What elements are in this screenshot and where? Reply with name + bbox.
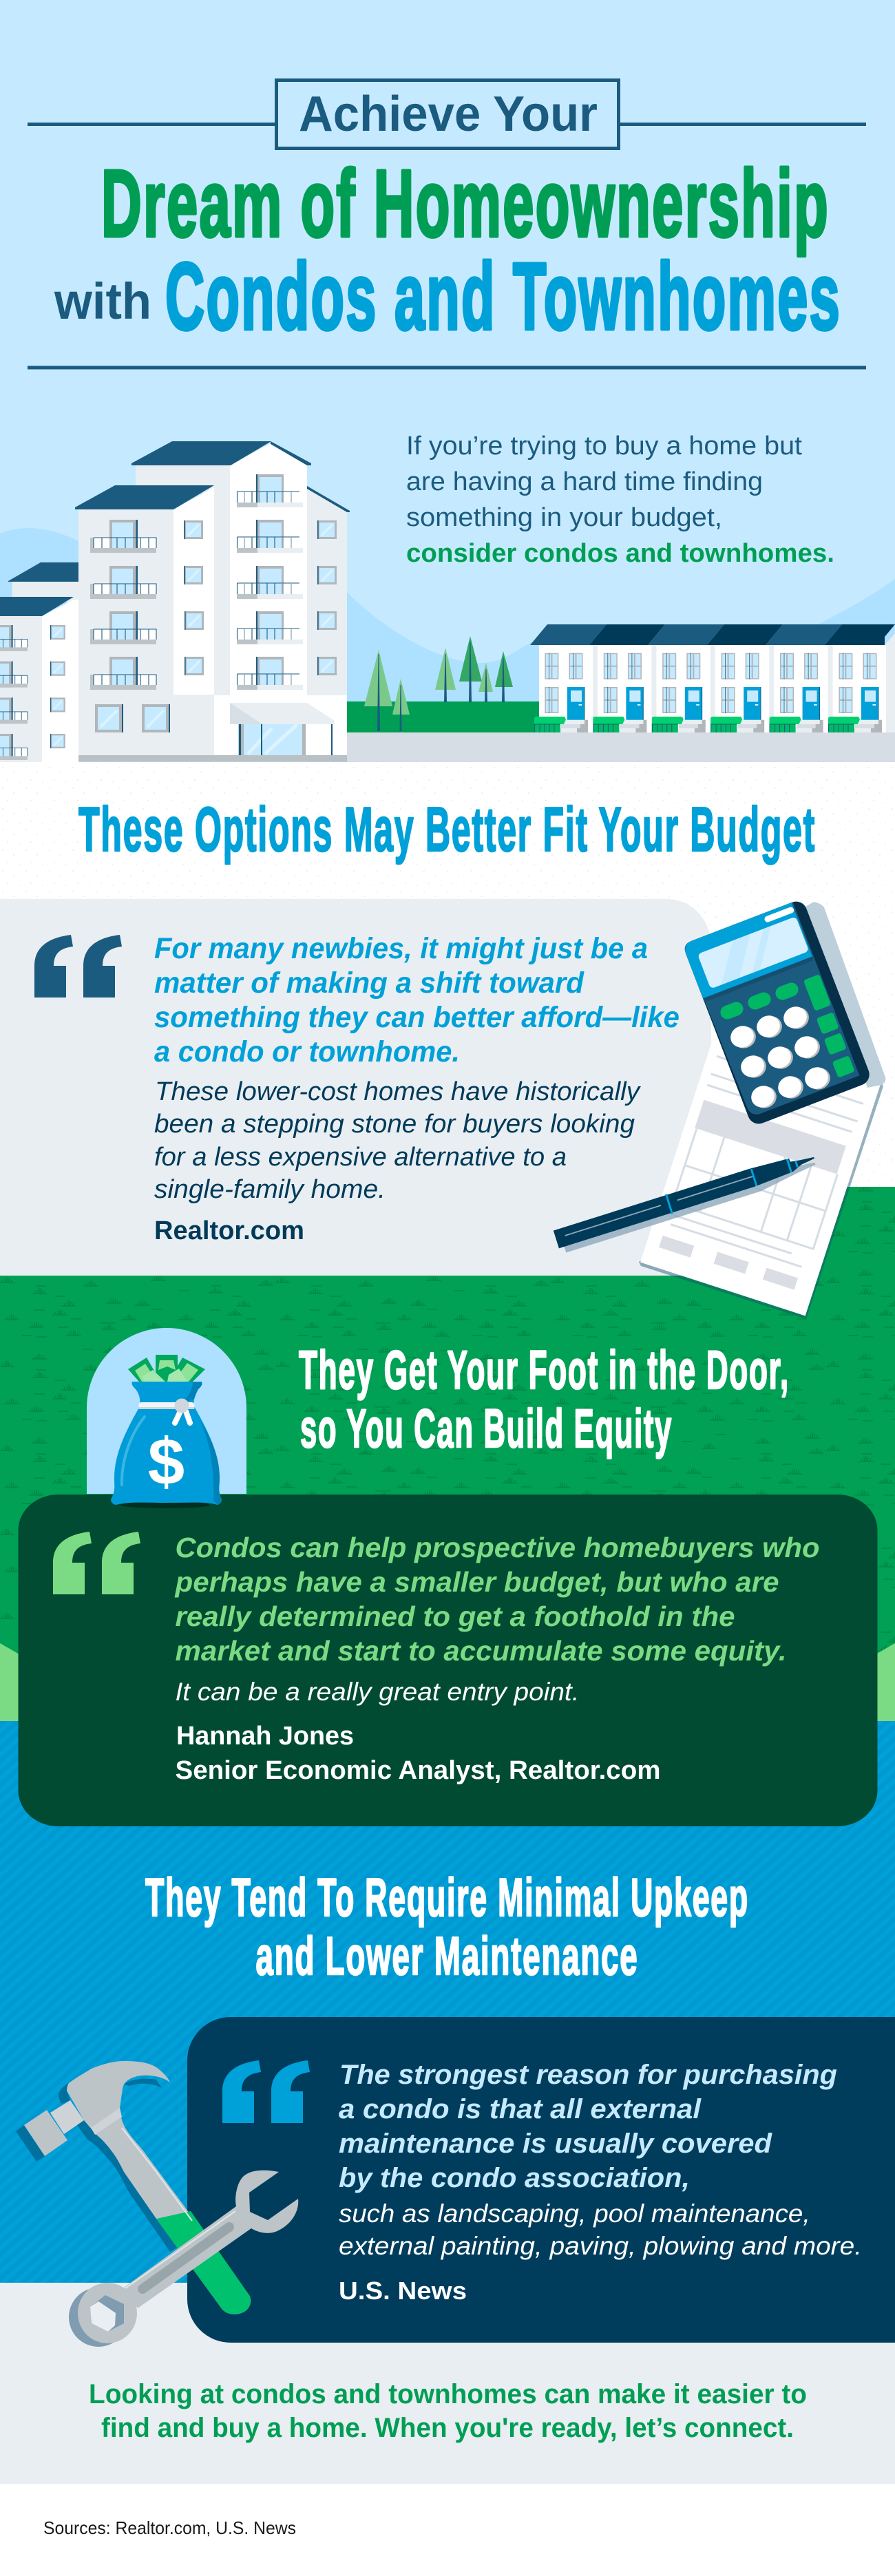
townhome units (534, 645, 892, 732)
quote two body: It can be a really great entry point. (175, 1678, 580, 1706)
quote one emphasis: something they can better afford—like (154, 1001, 680, 1034)
intro text: consider condos and townhomes. (406, 539, 834, 568)
icon: money bag arch (87, 1328, 246, 1494)
calculator shadow (802, 902, 885, 1088)
hammer grip (156, 2211, 251, 2314)
quote two source: Hannah Jones (176, 1722, 354, 1751)
tower right wall (307, 486, 347, 695)
quote three body: such as landscaping, pool maintenance, (339, 2199, 810, 2228)
awning (230, 703, 335, 724)
tower back wall (136, 465, 230, 493)
quote one body: single-family home. (154, 1175, 386, 1204)
hill left (0, 528, 78, 762)
title rule top (28, 123, 866, 126)
icon: money bag (111, 1355, 222, 1508)
quote three body: external painting, paving, plowing and more. (339, 2232, 862, 2260)
intro text: are having a hard time finding (406, 467, 763, 496)
quote one emphasis: matter of making a shift toward (154, 967, 585, 1000)
icon: trees (364, 636, 513, 731)
heading: equity (299, 1339, 790, 1459)
light green hill left (0, 1643, 28, 1721)
bag shade (181, 1382, 222, 1505)
ground floor windows (95, 704, 170, 732)
illustration: condo building, small wing (0, 562, 78, 762)
icon: quote mark three (222, 2060, 310, 2123)
paper shadow (639, 1082, 883, 1319)
light green hill right (867, 1643, 895, 1721)
wrench ring shadow (69, 2288, 128, 2347)
quote three emphasis: The strongest reason for purchasing (339, 2060, 837, 2090)
icon: hammer (16, 2061, 251, 2314)
intro text: If you’re trying to buy a home but (406, 432, 802, 461)
hammer highlight (122, 2128, 192, 2221)
pen shadow (562, 1159, 818, 1253)
quote one emphasis: For many newbies, it might just be a (154, 932, 648, 965)
wrench body (124, 2171, 298, 2308)
panel: blue striped section (0, 1721, 895, 2283)
sources: Sources: Realtor.com, U.S. News (43, 2517, 296, 2538)
bag highlight (122, 1417, 145, 1485)
title rule bottom (28, 366, 866, 369)
bag tie (139, 1399, 194, 1423)
lobby white section (214, 695, 347, 757)
panel: sky hero (0, 0, 895, 762)
quote two emphasis: Condos can help prospective homebuyers who (175, 1532, 819, 1563)
quote two emphasis (174, 1532, 819, 1667)
illustration: condo building, main tower (75, 441, 350, 761)
quote two emphasis: perhaps have a smaller budget, but who are (174, 1566, 779, 1598)
panel: quote card two (18, 1495, 877, 1826)
lobby doors (239, 724, 333, 755)
intro text: something in your budget, (406, 503, 722, 532)
wrench hex hole (90, 2301, 116, 2332)
hill right (310, 551, 895, 762)
title box (277, 80, 618, 149)
paper page (640, 1029, 881, 1316)
illustration: townhomes (530, 624, 895, 732)
quote one body (154, 1077, 641, 1204)
wrench ring (78, 2283, 137, 2343)
speckled white band (0, 762, 895, 1189)
calculator green keys (719, 974, 855, 1078)
hammer face (24, 2110, 67, 2156)
closing call to action (89, 2379, 807, 2443)
illustration: calculator (682, 898, 885, 1127)
icon: wrench (69, 2171, 298, 2347)
wrench highlight (125, 2211, 235, 2288)
hammer poll (50, 2100, 84, 2134)
banknotes (128, 1355, 205, 1382)
hammer collar (91, 2108, 122, 2135)
quote one source: Realtor.com (154, 1216, 304, 1245)
building base (78, 755, 347, 761)
quote three source: U.S. News (339, 2277, 467, 2305)
illustration: paper sheet (639, 1029, 883, 1319)
calculator number keys (728, 1003, 833, 1112)
title line: Achieve Your: Achieve Your (299, 87, 598, 142)
quote three emphasis: maintenance is usually covered (339, 2129, 773, 2159)
quote two source (175, 1722, 661, 1785)
dollar sign: $ (148, 1425, 185, 1499)
quote two source: Senior Economic Analyst, Realtor.com (175, 1756, 661, 1785)
title (28, 80, 866, 369)
bag body (111, 1382, 222, 1505)
closing call to action: find and buy a home. When you're ready, let’s connect. (101, 2413, 794, 2443)
quote one emphasis (154, 932, 680, 1068)
quote three body (339, 2199, 862, 2260)
townhome facade (539, 645, 886, 732)
side windows (184, 520, 337, 675)
townhome side wall (885, 633, 895, 732)
quote two emphasis: really determined to get a foothold in the (175, 1601, 735, 1632)
quote one body: been a stepping stone for buyers looking (154, 1110, 635, 1139)
quote one body: These lower-cost homes have historically (155, 1077, 641, 1106)
townhome roof (530, 624, 895, 645)
wrench hex shadow (90, 2295, 124, 2332)
quote three emphasis: by the condo association, (339, 2163, 690, 2193)
icon: quote mark two (53, 1532, 140, 1594)
quote three emphasis (339, 2060, 837, 2193)
pen body (554, 1149, 817, 1248)
tower gable (230, 443, 307, 695)
quote one body: for a less expensive alternative to a (154, 1143, 567, 1172)
ground and road (347, 701, 895, 762)
balconies left column (90, 520, 156, 690)
heading: upkeep: and Lower Maintenance (256, 1925, 639, 1986)
tower roof (131, 441, 271, 465)
intro text (406, 432, 834, 568)
mid roof (75, 485, 214, 509)
mid wall (78, 509, 214, 755)
quote two emphasis: market and start to accumulate some equity. (175, 1635, 786, 1667)
quote one emphasis: a condo or townhome. (154, 1035, 460, 1068)
calculator body (682, 898, 872, 1127)
title word: with: with (54, 273, 151, 330)
icon: quote mark one (34, 935, 122, 997)
heading: upkeep (145, 1867, 749, 1986)
closing call to action: Looking at condos and townhomes can make it easier to (89, 2379, 807, 2409)
quote two text (174, 1532, 819, 1785)
bag shadow (120, 1501, 210, 1508)
hammer shadow (16, 2079, 180, 2252)
panel: quote card three (187, 2017, 895, 2343)
wrench groove (143, 2227, 229, 2289)
quote three emphasis: a condo is that all external (339, 2094, 702, 2124)
mid white column (173, 487, 214, 695)
hammer handle and head (67, 2061, 251, 2314)
panel: light footer band (0, 2283, 895, 2484)
illustration: pen (553, 1149, 819, 1254)
panel: quote card one (0, 899, 716, 1276)
quote three text (339, 2060, 862, 2305)
quote one text (154, 932, 680, 1245)
balconies right column (237, 474, 303, 690)
panel: green grass section (0, 1187, 895, 1721)
